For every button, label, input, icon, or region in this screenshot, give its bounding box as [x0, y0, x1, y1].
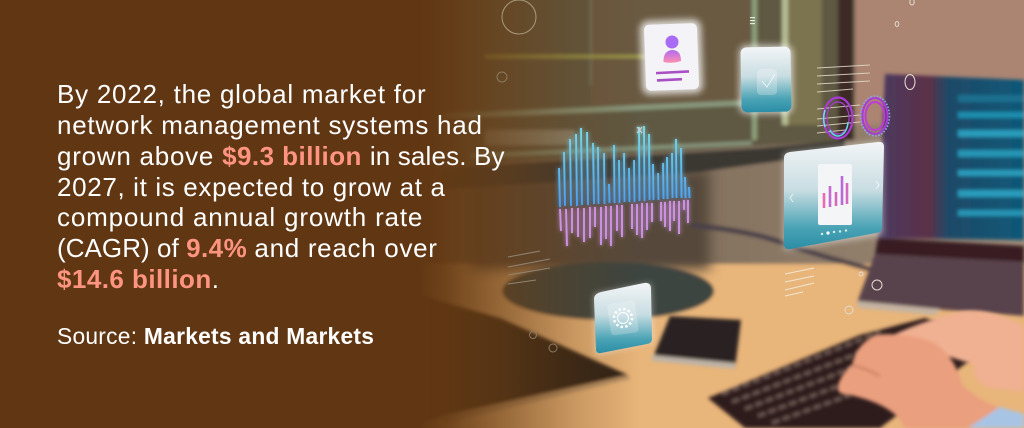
text: (CAGR) of 9.4% and reach over	[57, 233, 438, 263]
brown gradient overlay on photo	[418, 0, 640, 428]
desk surface	[400, 264, 1024, 428]
card: checkmark	[739, 45, 793, 114]
hud: text lines over desk	[785, 268, 814, 296]
wall behind the desk	[400, 0, 1024, 270]
hud: menu glyph	[750, 17, 755, 24]
pagination dots	[821, 229, 847, 235]
hud: large faint circle top left	[502, 0, 536, 34]
blue bars	[559, 126, 690, 207]
hud: text lines over stand	[508, 251, 550, 284]
chart marker	[637, 127, 642, 133]
waveform chart	[559, 126, 690, 246]
photo: right laptop	[857, 74, 1024, 316]
monitor screen	[400, 0, 855, 190]
monitor stand base	[502, 262, 714, 320]
hud: text lines right of monitor	[817, 65, 870, 133]
text: network management systems had	[57, 110, 483, 140]
solid brown text panel	[0, 0, 419, 428]
inner chart tile	[818, 164, 852, 225]
pink bars	[560, 200, 688, 246]
photo: keyboard	[708, 318, 990, 428]
source line: Source: Markets and Markets	[57, 323, 374, 349]
card: user profile	[640, 19, 703, 95]
text: compound annual growth rate	[57, 202, 423, 232]
hud: small circles	[530, 0, 915, 352]
main statistic paragraph	[57, 79, 505, 294]
card: bar chart panel	[784, 141, 884, 250]
cable	[690, 225, 880, 272]
ring icon: right	[860, 96, 890, 136]
photo: hands on keyboard	[838, 311, 1024, 428]
text: grown above $9.3 billion in sales. By	[57, 141, 505, 171]
wall upper right	[850, 0, 1024, 125]
carousel chevrons	[790, 181, 879, 202]
text: By 2022, the global market for	[57, 79, 426, 109]
photo: desk scene	[400, 0, 1024, 428]
mini bars	[824, 176, 847, 208]
photo: smartphone	[652, 316, 741, 369]
photo: left laptop	[400, 290, 630, 425]
hud: small faint circle	[497, 72, 507, 82]
background wall panel	[470, 170, 710, 270]
card: settings gear	[594, 283, 653, 355]
ring icon: left	[824, 98, 852, 138]
text: $14.6 billion.	[57, 264, 220, 294]
text: 2027, it is expected to grow at a	[57, 172, 446, 202]
